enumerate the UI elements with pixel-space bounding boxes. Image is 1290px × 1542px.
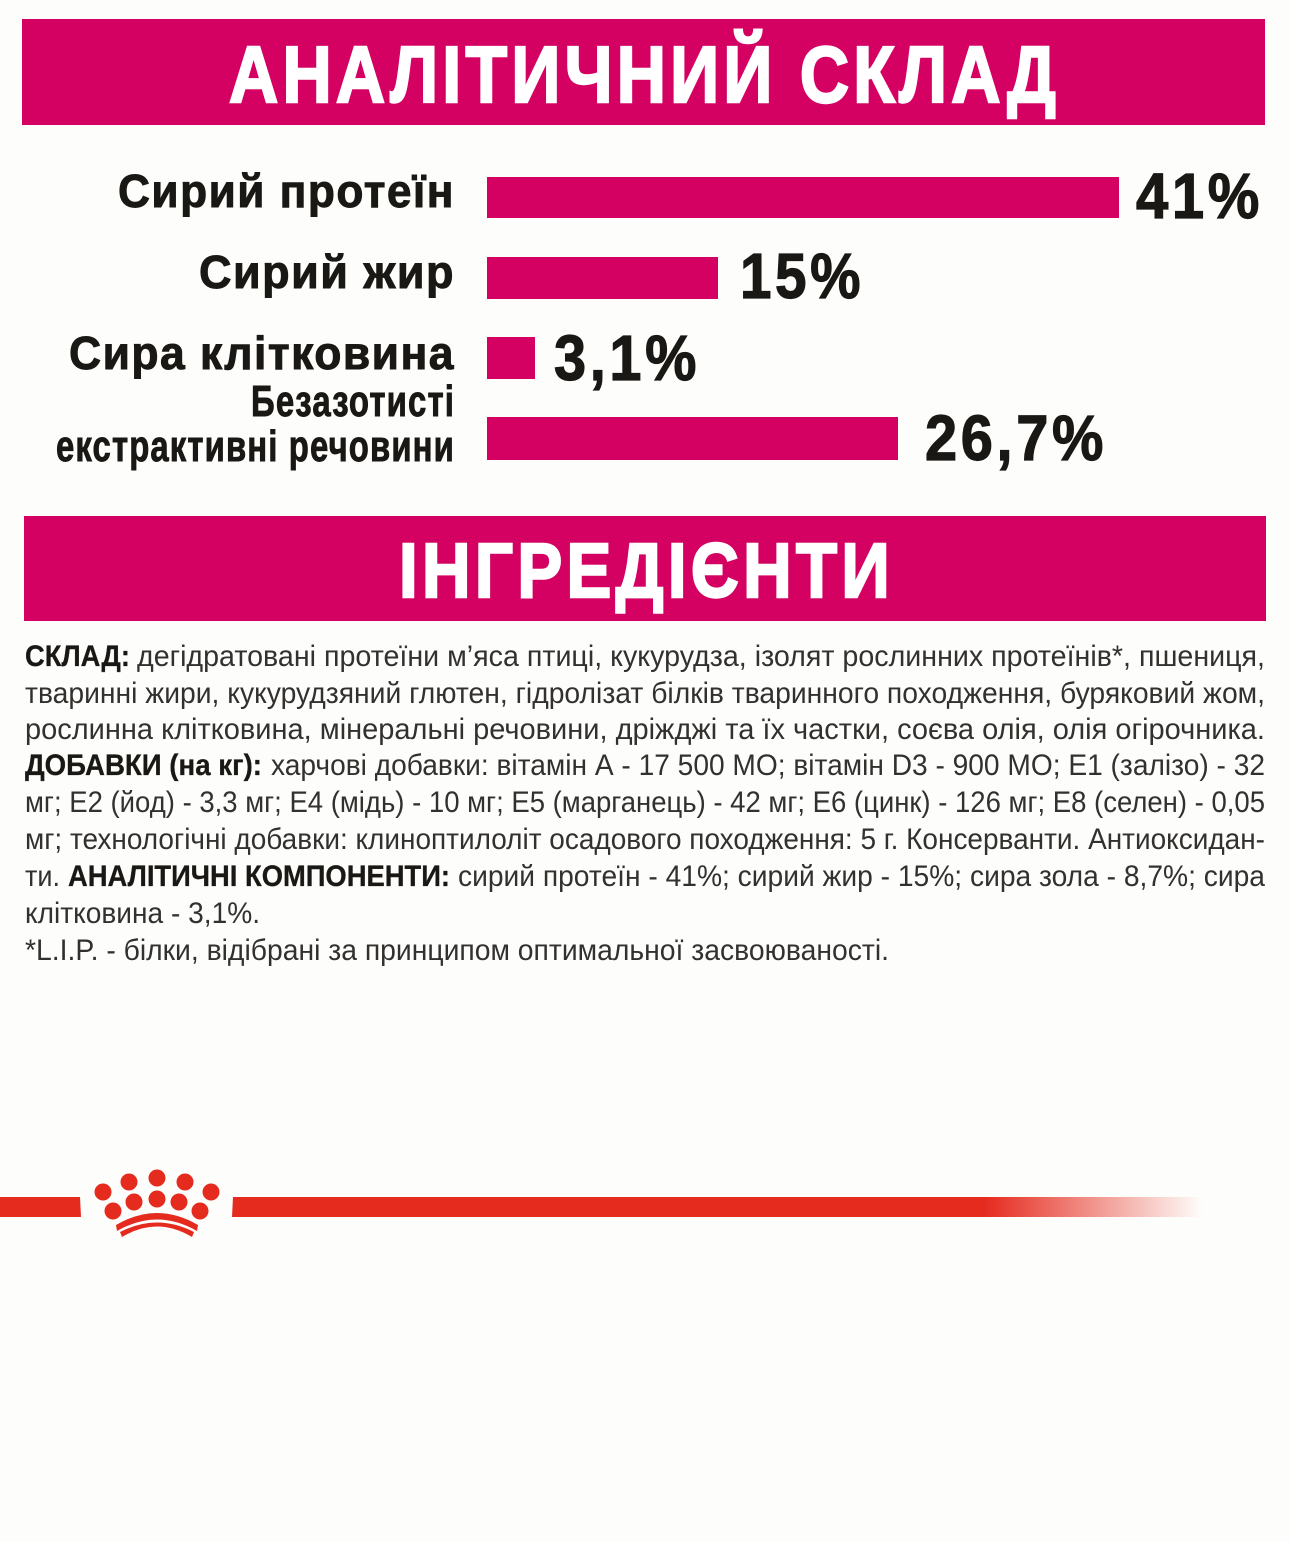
heading banner: analytical composition: АНАЛІТИЧНИЙ СКЛАД — [229, 29, 1060, 119]
ingredients text block: ти. — [25, 860, 60, 893]
row: crude fibre — [69, 322, 700, 394]
row: crude fat: 15% — [740, 240, 864, 312]
row: nitrogen-free extract: Безазотисті — [251, 377, 455, 426]
icon: crown — [94, 1170, 220, 1237]
heading banner: analytical composition — [22, 19, 1265, 125]
red line left — [0, 1197, 81, 1217]
red line right fading — [232, 1197, 1202, 1217]
row: crude fat: Сирий жир — [199, 246, 455, 298]
brand strip with crown — [0, 1170, 1202, 1237]
row: nitrogen-free extract: екстрактивні речовини — [56, 422, 455, 471]
row: crude protein: Сирий протеїн — [118, 165, 455, 217]
ingredients text block: АНАЛІТИЧНІ КОМПОНЕНТИ: — [68, 860, 450, 893]
ingredients text block: дегідратовані протеїни м’яса птиці, кукурудза, ізолят рослинних протеїнів*, пшениця, — [137, 640, 1265, 673]
ingredients text block: клітковина - 3,1%. — [25, 897, 260, 930]
heading banner: ingredients: ІНГРЕДІЄНТИ — [399, 528, 894, 614]
row: crude protein: 41% — [1136, 160, 1263, 232]
ingredients text block — [25, 640, 1265, 967]
ingredients text block: ДОБАВКИ (на кг): — [25, 749, 262, 782]
row: crude fat — [199, 240, 864, 312]
row: crude protein — [118, 160, 1263, 232]
row: nitrogen-free extract — [56, 377, 1107, 474]
ingredients text block: рослинна клітковина, мінеральні речовини, дріжджі та їх частки, соєва олія, олія огірочника. — [25, 713, 1265, 746]
row: crude fibre: Сира клітковина — [69, 327, 455, 379]
bar chart: analytical composition — [56, 160, 1263, 474]
ingredients text block: СКЛАД: — [25, 640, 130, 673]
ingredients text block: *L.I.P. - білки, відібрані за принципом оптимальної засвоюваності. — [25, 934, 889, 967]
row: nitrogen-free extract: 26,7% — [925, 402, 1107, 474]
row: crude fibre: 3,1% — [554, 322, 700, 394]
heading banner: ingredients — [24, 516, 1266, 621]
